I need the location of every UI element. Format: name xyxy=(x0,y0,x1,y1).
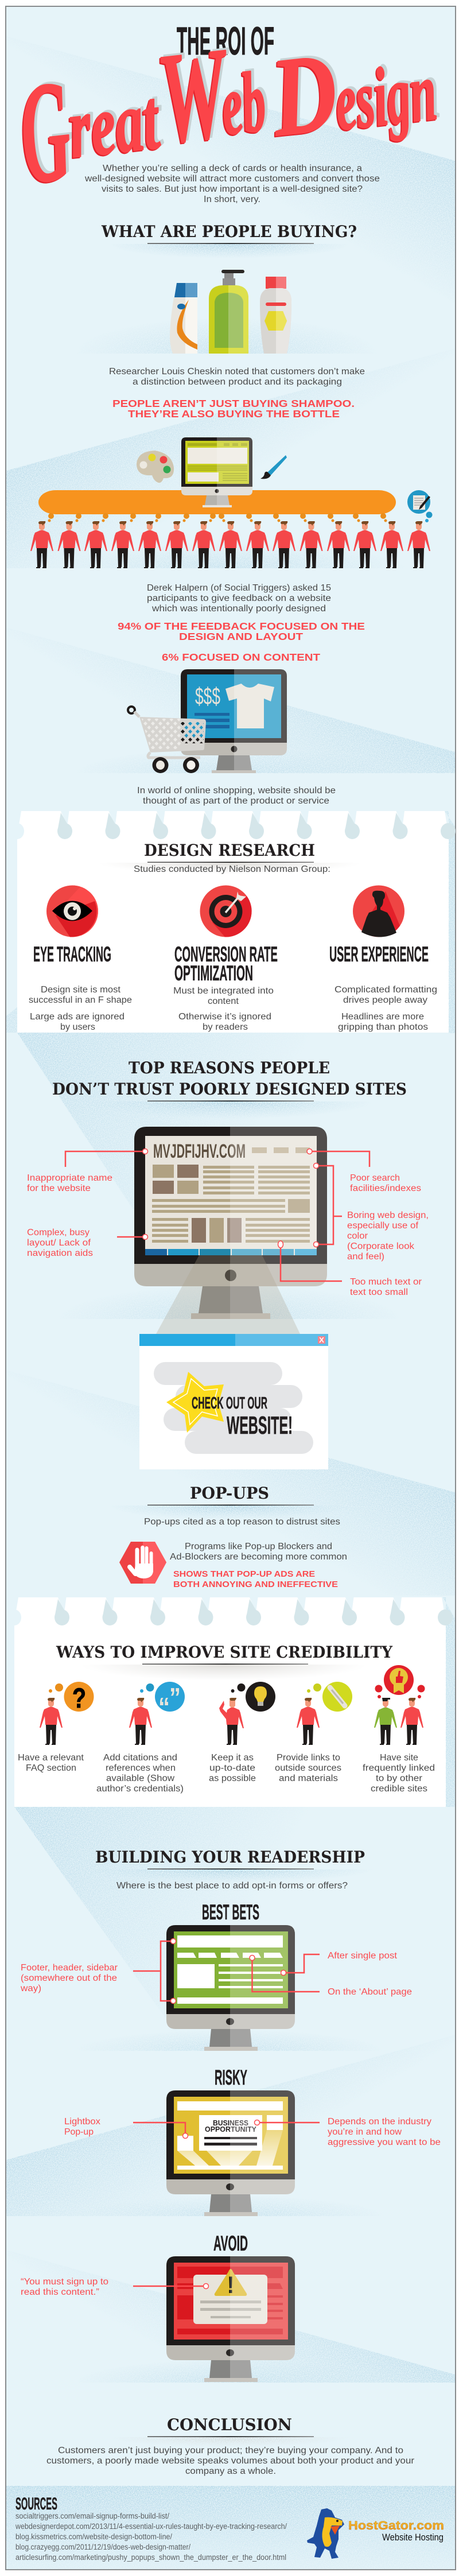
user experience column: drives people away xyxy=(343,995,427,1005)
conversion rate optimization column: content xyxy=(208,996,239,1006)
user experience column: Complicated formatting xyxy=(334,985,437,995)
conversion rate optimization column: by readers xyxy=(203,1022,248,1032)
item: citations xyxy=(96,1682,185,1794)
monitor: risky xyxy=(166,2090,295,2216)
callout: about page xyxy=(250,1955,412,1997)
callout: depends on industry: you’re in and how xyxy=(328,2127,402,2137)
text: online shopping: thought of as part of the product or service xyxy=(143,796,329,806)
logo text: HostGator.com xyxy=(348,2519,444,2532)
monitor: risky: OPPORTUNITY xyxy=(205,2125,256,2133)
panel: ways to improve credibility xyxy=(7,1597,453,1807)
text: cheskin: a distinction between product and its packaging xyxy=(133,377,342,387)
eye tracking column: EYE TRACKING xyxy=(33,942,111,966)
sources list: webdesignerdepot.com/2013/11/4-essential-ux-rules-taught-by-eye-tracking-research/ xyxy=(15,2522,287,2531)
callout: after single post xyxy=(281,1951,398,1976)
infographic canvas: THE ROI OF xyxy=(177,19,274,63)
callout: you must sign up xyxy=(21,2277,209,2297)
gray clouds xyxy=(154,1362,313,1454)
callout: depends on industry: Depends on the industry xyxy=(328,2117,431,2127)
intro text: Whether you’re selling a deck of cards or health insurance, a xyxy=(103,164,362,173)
text: halpern: which was intentionally poorly designed xyxy=(151,604,326,614)
text: online shopping: In world of online shopping, website should be xyxy=(137,786,336,796)
red callout: annoying and ineffective: SHOWS THAT POP-UP ADS ARE xyxy=(173,1569,315,1579)
item: citations: “ xyxy=(158,1692,170,1722)
icon: paint brush xyxy=(260,455,287,479)
red callout: 94 percent xyxy=(118,620,365,642)
monitor: best bets xyxy=(166,1925,295,2051)
title: great web design script xyxy=(12,20,441,214)
item: credible links: frequently linked xyxy=(363,1763,435,1773)
callouts: risky xyxy=(64,2117,441,2147)
text: halpern: participants to give feedback on a website xyxy=(147,593,331,603)
starburst xyxy=(166,1372,224,1433)
item: faq: ? xyxy=(72,1683,86,1714)
red callout: 6 percent: 6% FOCUSED ON CONTENT xyxy=(162,651,320,663)
thought bubbles xyxy=(48,513,387,522)
heading: conclusion: CONCLUSION xyxy=(167,2415,292,2434)
text: online shopping xyxy=(137,786,336,806)
icon: target xyxy=(200,885,252,937)
callout: about page: On the ‘About’ page xyxy=(328,1987,412,1997)
icon: monitor with t-shirt: $$$ xyxy=(195,682,220,709)
red callout: 94 percent: DESIGN AND LAYOUT xyxy=(179,631,303,642)
green pump bottle xyxy=(209,270,248,354)
icon: large monitor with bad website: MVJDFIJHV.COM xyxy=(153,1140,246,1162)
infographic canvas: SOURCES xyxy=(15,2494,57,2513)
heading: design research: DESIGN RESEARCH xyxy=(144,841,315,860)
popup text: CHECK OUT OUR xyxy=(192,1394,267,1413)
rule shadow xyxy=(80,1665,367,1697)
callout: boring web design: and feel) xyxy=(347,1252,384,1262)
subtitle: Studies conducted by Nielson Norman Group: xyxy=(134,864,330,874)
icon: gator mascot xyxy=(307,2508,344,2559)
popup light beam xyxy=(156,1255,300,1334)
text: halpern: Derek Halpern (of Social Triggers) asked 15 xyxy=(147,583,331,593)
title: great web design script: W xyxy=(152,20,239,170)
text: pop-ups cited: Pop-ups cited as a top reason to distrust sites xyxy=(144,1517,340,1527)
conclusion text: customers, a poorly made website speaks volumes about both your product and your xyxy=(46,2456,414,2466)
callout: poor search: facilities/indexes xyxy=(350,1184,421,1193)
icon: shampoo bottles xyxy=(170,270,291,354)
icon: eye xyxy=(46,885,98,937)
callout: complex layout xyxy=(27,1228,148,1258)
item: links: outside sources xyxy=(275,1763,341,1773)
monitor: avoid: ! xyxy=(227,2271,234,2298)
item: faq xyxy=(18,1682,94,1773)
sources list: articlesurfing.com/marketing/pushy_popups_shown_the_dumpster_er_the_door.html xyxy=(15,2553,286,2562)
user experience column xyxy=(329,942,437,1032)
eye tracking column: successful in an F shape xyxy=(29,995,132,1005)
item: credible links: credible sites xyxy=(371,1784,427,1794)
rule shadow xyxy=(98,863,361,886)
notebook paper xyxy=(7,1597,453,1807)
orange feedback bar xyxy=(38,490,396,514)
icon: shopping cart xyxy=(128,707,206,773)
item: up to date xyxy=(209,1682,275,1783)
sources list: socialtriggers.com/email-signup-forms-build-list/ xyxy=(15,2512,169,2520)
conversion rate optimization column: Must be integrated into xyxy=(173,986,274,996)
callout: inappropriate name xyxy=(27,1149,148,1193)
item: links: and materials xyxy=(279,1774,338,1783)
callout: too much text: Too much text or xyxy=(350,1277,422,1287)
notebook paper xyxy=(10,811,456,1033)
text: ad blockers xyxy=(170,1542,347,1562)
callout: lightbox: Lightbox xyxy=(64,2117,100,2127)
callout: boring web design: Boring web design, xyxy=(347,1211,429,1220)
item: citations: Add citations and xyxy=(103,1753,177,1763)
popup window xyxy=(139,1334,328,1469)
eye tracking column: by users xyxy=(60,1022,95,1032)
logo tagline: Website Hosting xyxy=(382,2532,444,2543)
heading: risky: RISKY xyxy=(215,2066,247,2089)
callouts: bad website annotations xyxy=(27,1149,429,1297)
heading: what are people buying: WHAT ARE PEOPLE BUYING? xyxy=(101,222,357,241)
eye tracking column: Design site is most xyxy=(41,985,121,995)
callout: inappropriate name: Inappropriate name xyxy=(27,1173,112,1183)
callout: boring web design xyxy=(313,1163,429,1262)
text: cheskin: Researcher Louis Cheskin noted that customers don’t make xyxy=(109,367,365,377)
sources list: blog.crazyegg.com/2011/12/19/does-web-design-matter/ xyxy=(15,2543,190,2551)
red callout: shampoo xyxy=(112,398,355,420)
heading: top reasons: DON’T TRUST POORLY DESIGNED SITES xyxy=(52,1080,407,1099)
conclusion text: company as a whole. xyxy=(185,2466,276,2476)
title: great web design script: eb xyxy=(216,53,270,153)
callout: too much text xyxy=(278,1241,422,1297)
icon: small monitor with website xyxy=(181,437,252,507)
text: halpern xyxy=(147,583,331,614)
callout: inappropriate name: for the website xyxy=(27,1184,91,1193)
intro text: well-designed website will attract more customers and convert those xyxy=(84,174,380,184)
text: cheskin xyxy=(109,367,365,387)
callout: footer header sidebar: way) xyxy=(20,1984,41,1993)
white bottle xyxy=(260,277,291,354)
close button xyxy=(318,1336,325,1344)
conversion rate optimization column: OPTIMIZATION xyxy=(174,961,253,985)
item: links xyxy=(275,1682,352,1783)
callout: depends on industry: aggressive you want to be xyxy=(328,2137,441,2147)
infographic canvas: BEST BETS xyxy=(202,1900,259,1924)
callout: poor search xyxy=(307,1149,421,1193)
text: ad blockers: Ad-Blockers are becoming more common xyxy=(170,1552,347,1562)
title: great web design script: reat xyxy=(64,71,165,176)
callout: complex layout: navigation aids xyxy=(27,1248,93,1258)
red callout: shampoo: PEOPLE AREN’T JUST BUYING SHAMPOO. xyxy=(112,398,355,409)
item: up to date: up-to-date xyxy=(209,1763,255,1773)
heading rule xyxy=(147,2436,314,2437)
intro text: visits to sales. But just how important is a well-designed site? xyxy=(102,184,363,194)
item: up to date: as possible xyxy=(209,1774,256,1783)
red callout: 94 percent: 94% OF THE FEEDBACK FOCUSED ON THE xyxy=(118,620,365,632)
conversion rate optimization column: Otherwise it’s ignored xyxy=(178,1012,271,1022)
heading: top reasons: TOP REASONS PEOPLE xyxy=(129,1058,330,1077)
heading: top reasons xyxy=(52,1058,407,1099)
item: faq: Have a relevant xyxy=(18,1753,84,1763)
popup text large: WEBSITE! xyxy=(227,1411,293,1440)
heading: WAYS TO IMPROVE SITE CREDIBILITY xyxy=(56,1643,393,1662)
conclusion text xyxy=(46,2446,414,2476)
icon: monitor with t-shirt xyxy=(181,669,287,773)
icon: large monitor with bad website xyxy=(134,1127,327,1319)
conversion rate optimization column: CONVERSION RATE xyxy=(174,942,278,966)
callout: footer header sidebar: Footer, header, sidebar xyxy=(21,1963,118,1973)
callout: boring web design: especially use of xyxy=(347,1221,419,1231)
title: great web design script: G xyxy=(12,51,78,214)
heading: avoid: AVOID xyxy=(213,2232,248,2255)
callout: complex layout: layout/ Lack of xyxy=(27,1238,91,1248)
callout: complex layout: Complex, busy xyxy=(27,1228,90,1237)
callout: too much text: text too small xyxy=(350,1287,408,1297)
red callout: annoying and ineffective: BOTH ANNOYING AND INEFFECTIVE xyxy=(173,1580,338,1589)
callout: boring web design: color xyxy=(347,1231,368,1241)
monitor: avoid xyxy=(166,2256,295,2382)
item: credible links: Have site xyxy=(380,1753,418,1763)
heading: building your readership: BUILDING YOUR READERSHIP xyxy=(95,1848,365,1867)
logo: hostgator xyxy=(307,2508,444,2559)
heading rule xyxy=(142,1663,308,1665)
callout: lightbox: Pop-up xyxy=(64,2127,94,2137)
text: ad blockers: Programs like Pop-up Blockers and xyxy=(185,1542,332,1551)
user experience column: Headlines are more xyxy=(341,1012,424,1022)
intro text xyxy=(84,164,380,204)
item: citations: author’s credentials) xyxy=(96,1784,184,1794)
item: links: Provide links to xyxy=(277,1753,340,1763)
question text: Where is the best place to add opt-in forms or offers? xyxy=(116,1881,348,1891)
sources list: blog.kissmetrics.com/website-design-bottom-line/ xyxy=(15,2532,172,2541)
conclusion text: Customers aren’t just buying your product; they’re buying your company. And to xyxy=(58,2446,403,2455)
callout: poor search: Poor search xyxy=(350,1173,400,1183)
callouts: best bets xyxy=(20,1939,412,2003)
user experience column: gripping than photos xyxy=(338,1022,428,1032)
red callout: shampoo: THEY’RE ALSO BUYING THE BOTTLE xyxy=(128,408,340,420)
title: great web design script: D xyxy=(264,30,343,160)
sources list xyxy=(15,2512,287,2562)
item: citations: available (Show xyxy=(106,1774,175,1783)
callout: after single post: After single post xyxy=(328,1951,398,1961)
callout: footer header sidebar: (somewhere out of the xyxy=(21,1973,117,1983)
panel: design research xyxy=(10,811,456,1033)
icon: user silhouette xyxy=(353,885,404,937)
eye tracking column: Large ads are ignored xyxy=(30,1012,125,1022)
item: credible links xyxy=(363,1665,435,1794)
callout: you must sign up: “You must sign up to xyxy=(21,2277,108,2287)
item: up to date: Keep it as xyxy=(211,1753,254,1763)
row of 15 people xyxy=(30,521,430,568)
heading rule xyxy=(147,862,314,863)
conversion rate optimization column xyxy=(173,942,278,1032)
heading rule xyxy=(147,243,314,244)
callout: lightbox xyxy=(64,2117,188,2139)
callout: you must sign up: read this content.” xyxy=(21,2287,99,2297)
callout: boring web design: (Corporate look xyxy=(347,1242,414,1251)
eye tracking column xyxy=(29,942,132,1032)
heading: pop-ups: POP-UPS xyxy=(190,1484,269,1503)
item: citations: ” xyxy=(169,1682,181,1712)
intro text: In short, very. xyxy=(204,195,260,204)
red callout: annoying and ineffective xyxy=(173,1569,338,1589)
item: citations: references when xyxy=(106,1763,176,1773)
heading rule xyxy=(147,1505,314,1506)
blue bottle xyxy=(170,283,197,354)
item: faq: FAQ section xyxy=(26,1763,76,1773)
monitor: risky: BUSINESS xyxy=(213,2119,248,2127)
icon: stop hand xyxy=(119,1542,166,1584)
callout: depends on industry xyxy=(255,2117,441,2147)
item: credible links: to by other xyxy=(376,1774,422,1783)
close button: X xyxy=(319,1336,324,1344)
icon: paint palette xyxy=(137,451,174,483)
callout: footer header sidebar xyxy=(20,1939,176,2003)
icon: document thought bubble xyxy=(407,490,433,522)
